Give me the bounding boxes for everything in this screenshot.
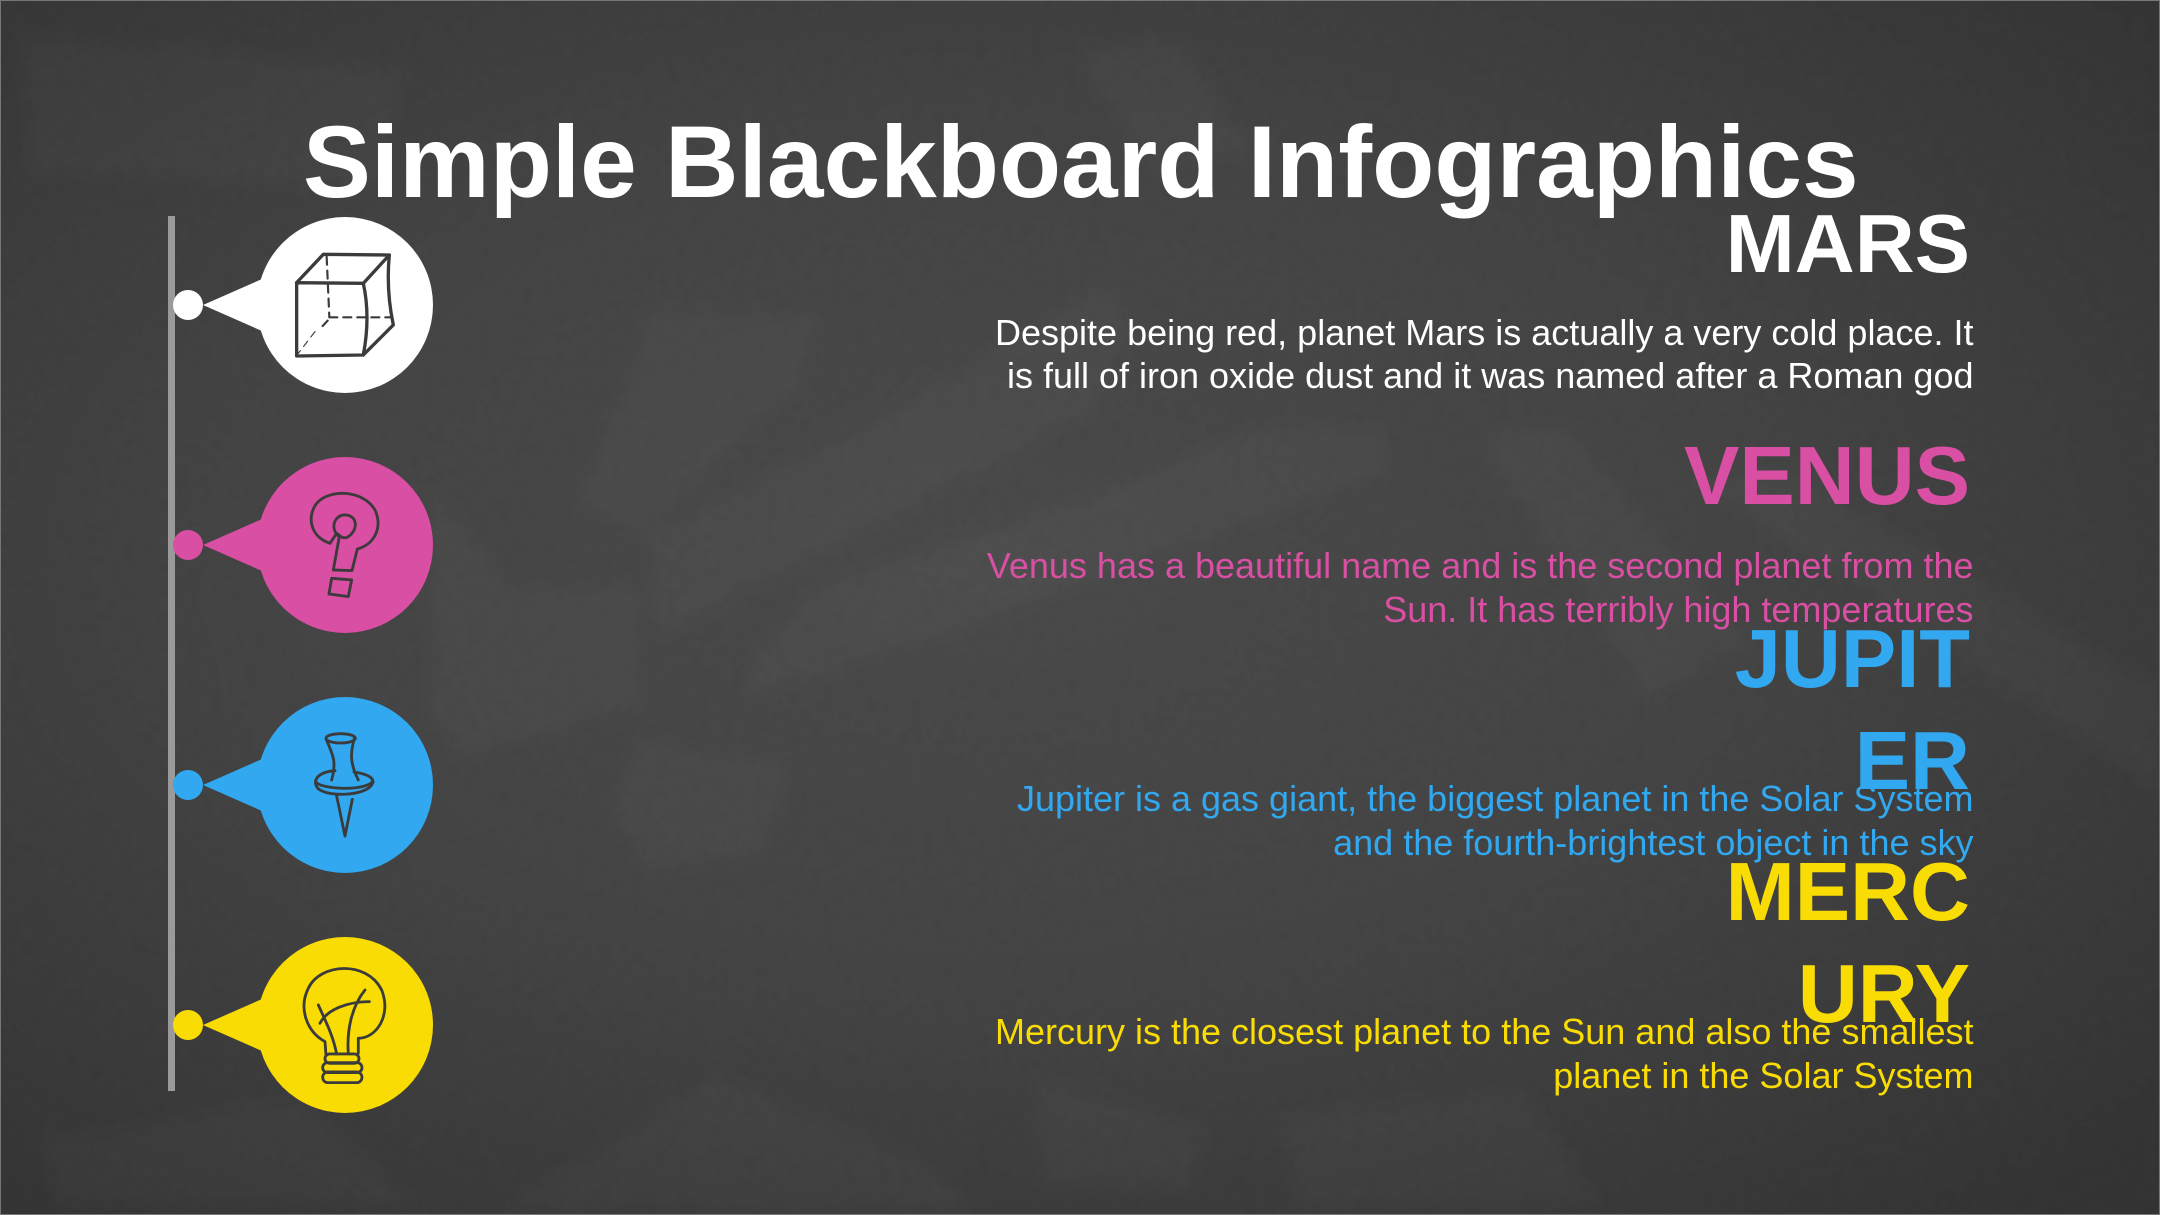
text block: Mercury: URY: [1798, 947, 1970, 1040]
text block: Jupiter: Jupiter is a gas giant, the biggest planet in the Solar System: [1017, 778, 1974, 819]
marker: Mars, cube icon: [173, 217, 433, 393]
timeline line: [168, 216, 175, 1091]
text block: Jupiter: ER: [1855, 714, 1970, 807]
text block: Jupiter: [1017, 612, 1974, 863]
text block: Mars: Despite being red, planet Mars is actually a very cold place. It: [995, 312, 1974, 353]
title: Simple Blackboard Infographics: [303, 105, 1859, 219]
text block: Venus: VENUS: [1684, 429, 1970, 522]
marker: Mercury, light bulb icon: [173, 937, 433, 1113]
text block: Mercury: planet in the Solar System: [1553, 1055, 1974, 1096]
text block: Mercury: [995, 845, 1974, 1096]
icon: light bulb: [304, 969, 385, 1083]
text block: Mars: [995, 197, 1974, 396]
text block: Venus: Sun. It has terribly high temperatures: [1383, 589, 1974, 630]
text block: Mercury: MERC: [1726, 845, 1970, 938]
text block: Mars: is full of iron oxide dust and it was named after a Roman god: [1007, 355, 1974, 396]
icon: cube: [297, 254, 393, 356]
text block: Jupiter: and the fourth-brightest object in the sky: [1333, 822, 1974, 863]
text block: Jupiter: JUPIT: [1735, 612, 1970, 705]
text block: Venus: [987, 429, 1974, 630]
icon: push pin: [316, 734, 373, 836]
text block: Mars: MARS: [1726, 197, 1970, 290]
text block: Venus: Venus has a beautiful name and is the second planet from the: [987, 545, 1974, 586]
icon: question mark: [311, 493, 378, 597]
marker: Jupiter, push pin icon: [173, 697, 433, 873]
text block: Mercury: Mercury is the closest planet to the Sun and also the smallest: [995, 1011, 1974, 1052]
marker: Venus, question mark icon: [173, 457, 433, 633]
